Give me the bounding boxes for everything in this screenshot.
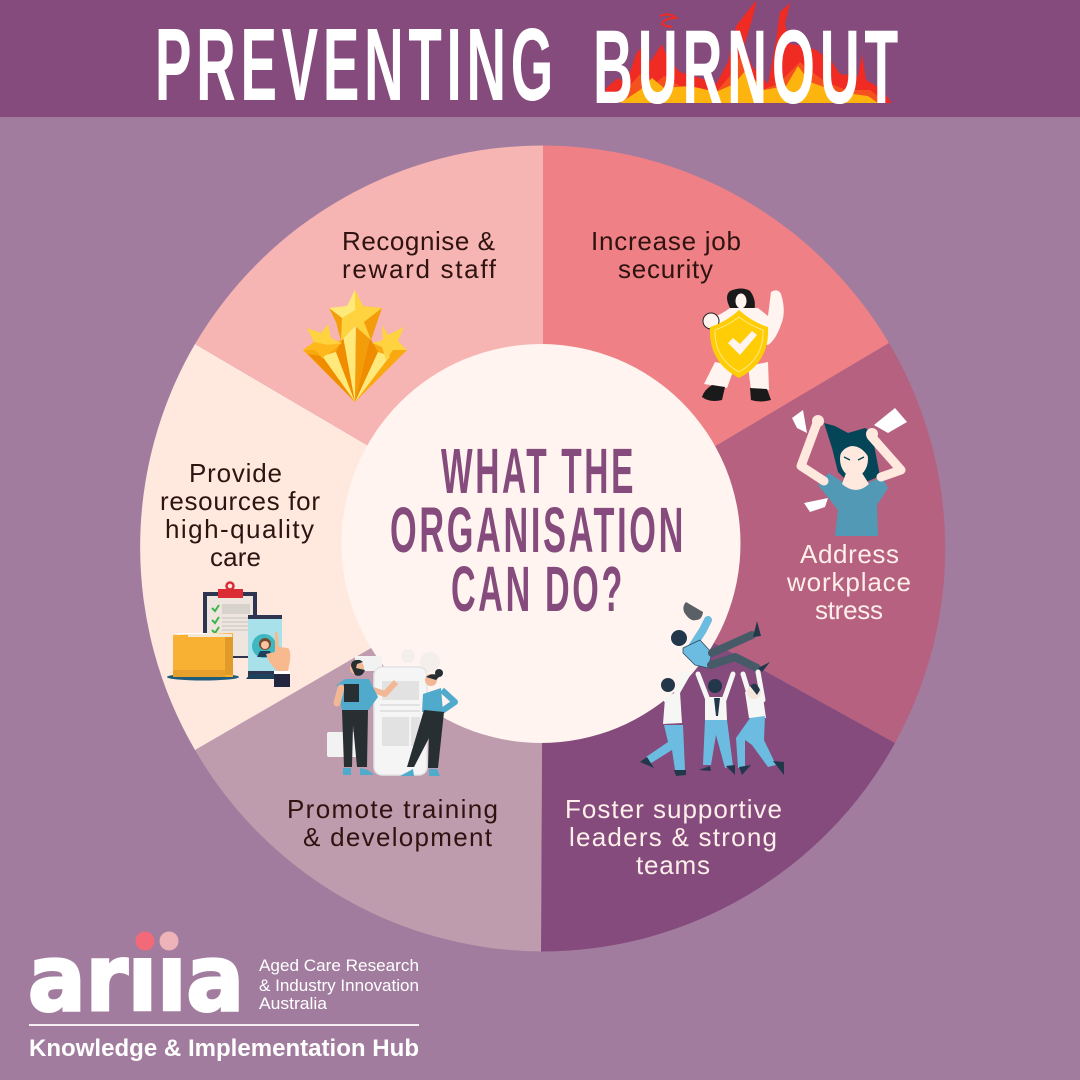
title: PREVENTING <box>155 7 558 122</box>
centre heading: CAN DO? <box>451 553 625 625</box>
label: address workplace stress: workplace <box>786 567 911 597</box>
label: increase job security: security <box>618 254 713 284</box>
label: promote training <box>287 794 498 852</box>
icon: two people with a phone screen <box>327 649 455 776</box>
hub name: Knowledge & Implementation Hub <box>29 1035 419 1062</box>
divider line <box>29 1024 419 1026</box>
label: foster supportive leaders: Foster supportive <box>565 794 782 824</box>
centre heading: ORGANISATION <box>390 494 686 566</box>
label: foster supportive leaders <box>565 794 782 880</box>
pie chart wedges <box>140 145 945 952</box>
header band <box>0 0 1080 117</box>
icon: person with security shield <box>702 288 784 402</box>
logo: ariia wordmark: ariia <box>28 925 244 1032</box>
label: increase job security <box>591 226 741 284</box>
label: recognise and reward staff: Recognise & <box>342 226 495 256</box>
icon: gold stars <box>303 290 407 402</box>
label: foster supportive leaders: leaders & strong <box>569 822 777 852</box>
label: provide resources: Provide <box>189 458 282 488</box>
logo descriptor text <box>259 956 419 1013</box>
label: provide resources: high-quality <box>165 514 314 544</box>
logo descriptor text: & Industry Innovation <box>259 976 419 995</box>
centre circle <box>342 344 740 743</box>
label: provide resources: resources for <box>160 486 320 516</box>
label: address workplace stress: Address <box>800 539 899 569</box>
label: address workplace stress <box>786 539 911 625</box>
label: recognise and reward staff <box>342 226 497 284</box>
centre heading <box>390 435 686 625</box>
label: provide resources: care <box>210 542 261 572</box>
icon: clipboard, tablet and folder <box>167 582 290 687</box>
label: promote training: & development <box>303 822 493 852</box>
label: provide resources <box>160 458 320 572</box>
label: recognise and reward staff: reward staff <box>342 254 497 284</box>
label: address workplace stress: stress <box>815 595 883 625</box>
logo descriptor text: Aged Care Research <box>259 956 419 975</box>
label: increase job security: Increase job <box>591 226 741 256</box>
icon: stressed woman with papers <box>792 408 907 536</box>
label: promote training: Promote training <box>287 794 498 824</box>
logo descriptor text: Australia <box>259 994 328 1013</box>
icon: team lifting colleague <box>640 602 784 776</box>
label: foster supportive leaders: teams <box>636 850 710 880</box>
centre heading: WHAT THE <box>441 435 636 507</box>
icon: flames behind title <box>604 0 892 103</box>
